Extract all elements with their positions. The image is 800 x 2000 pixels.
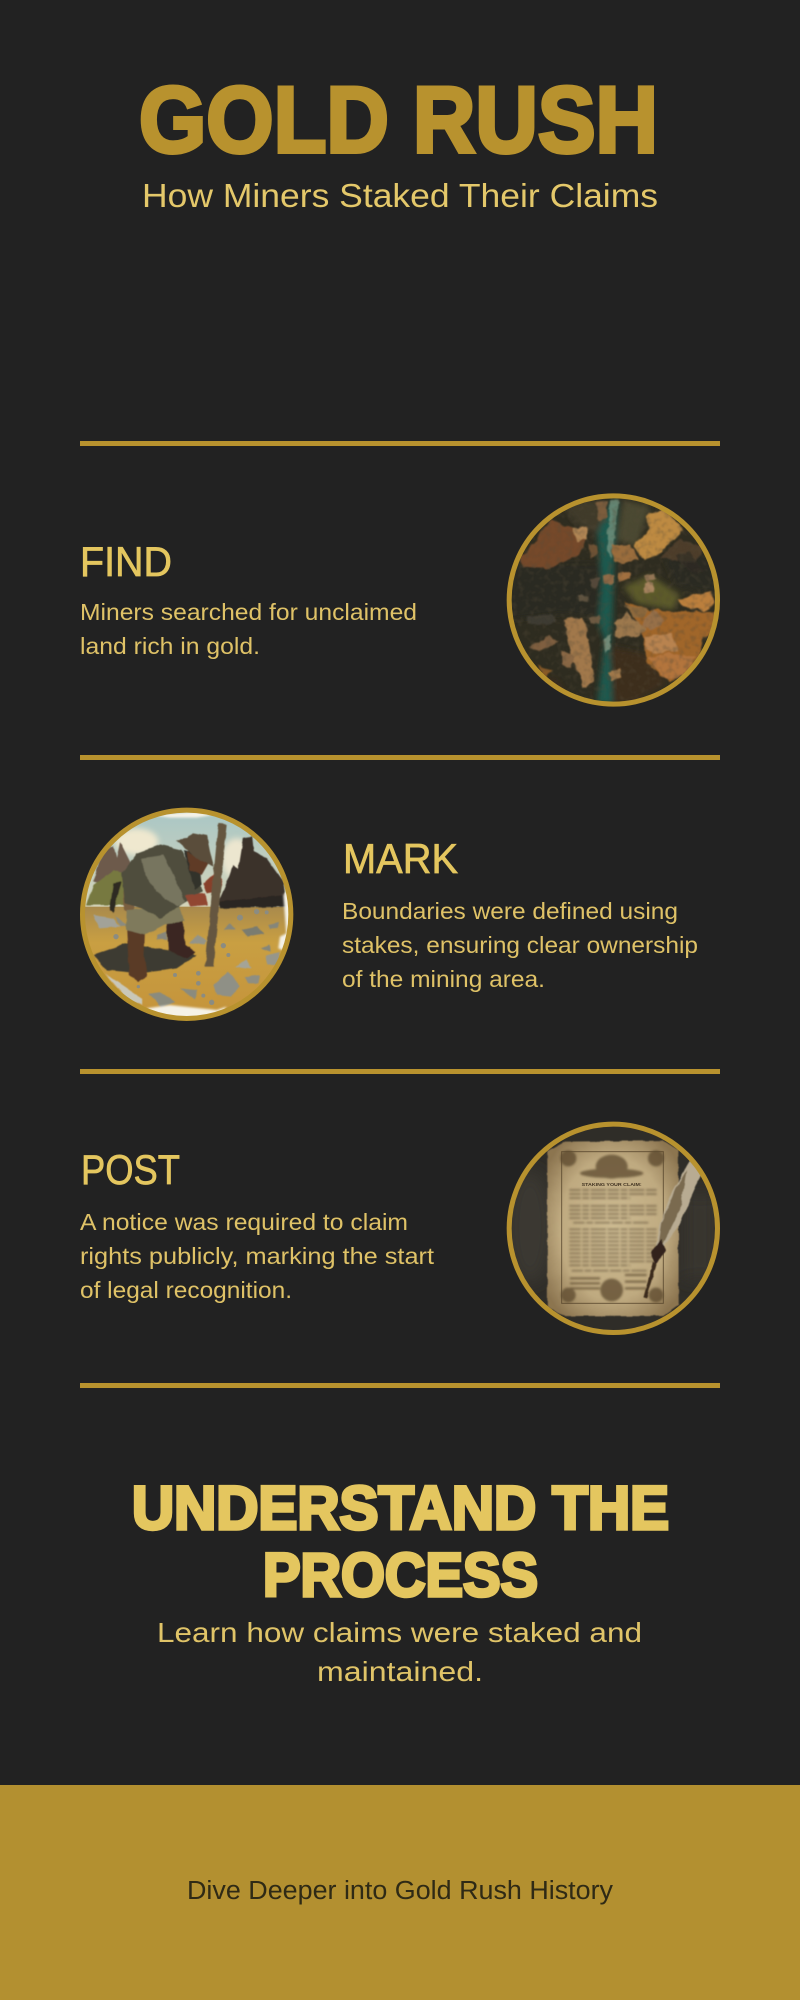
text: mark description: Boundaries were defined using: [342, 898, 678, 924]
heading: mark: MARK: [343, 835, 458, 882]
text: mark description: [342, 898, 698, 992]
image: claim notice and quill: [503, 1117, 723, 1340]
closing heading: [132, 1474, 669, 1609]
text: find description: Miners searched for unclaimed: [80, 599, 417, 625]
closing text: maintained.: [317, 1656, 483, 1687]
text: find description: [80, 599, 417, 659]
text: post description: A notice was required to claim: [80, 1209, 408, 1235]
closing text: Learn how claims were staked and: [157, 1617, 642, 1648]
footer band: [0, 1785, 800, 2000]
text: find description: land rich in gold.: [80, 633, 260, 659]
panel: mark: [77, 805, 698, 1027]
panel: post: [80, 1117, 723, 1340]
subtitle: How Miners Staked Their Claims: [142, 177, 658, 214]
closing heading: PROCESS: [263, 1541, 538, 1609]
closing text: [157, 1617, 642, 1687]
image: miner driving a stake: [77, 805, 297, 1027]
heading: find: FIND: [80, 538, 172, 585]
text: post description: [80, 1209, 434, 1303]
text: post description: rights publicly, marking the start: [80, 1243, 434, 1269]
heading: post: POST: [81, 1146, 180, 1193]
text: mark description: of the mining area.: [342, 966, 545, 992]
image: claim notice and quill: STAKING YOUR CLAIM:: [582, 1182, 642, 1188]
image: aerial view of river through rocks: [503, 490, 723, 710]
footer text: Dive Deeper into Gold Rush History: [187, 1877, 613, 1905]
closing heading: UNDERSTAND THE: [132, 1474, 669, 1542]
title: GOLD RUSH: [139, 67, 658, 172]
text: post description: of legal recognition.: [80, 1277, 292, 1303]
panel: find: [80, 490, 723, 710]
text: mark description: stakes, ensuring clear ownership: [342, 932, 698, 958]
